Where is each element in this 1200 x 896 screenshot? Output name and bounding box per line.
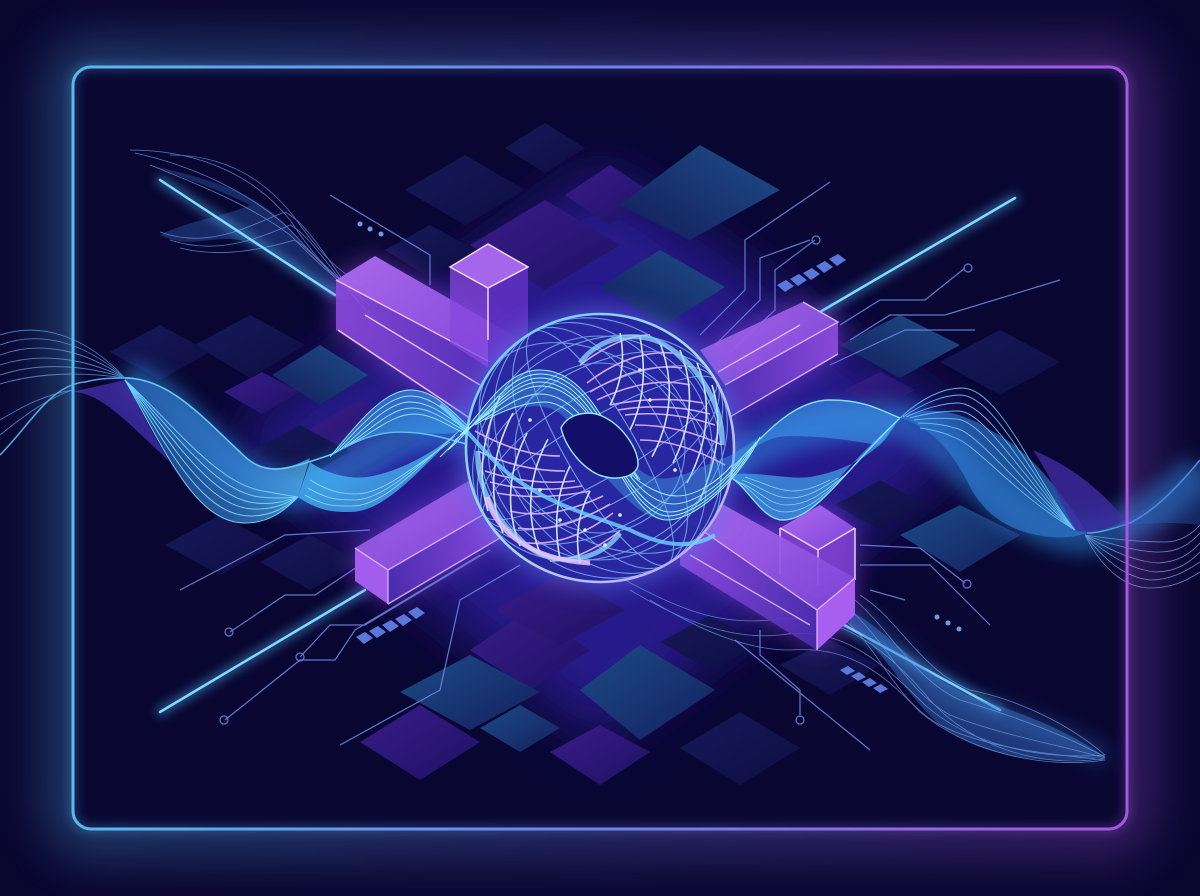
wave: upper left ribbon bbox=[130, 150, 375, 318]
beam: upright block upper bbox=[450, 244, 528, 368]
sphere body bbox=[465, 313, 735, 583]
wave: main right ribbon bbox=[725, 388, 1200, 588]
lower purple strand bbox=[487, 497, 590, 563]
frame glow bbox=[73, 67, 1127, 829]
torus ribs upper right bbox=[580, 333, 725, 500]
sparkle points bbox=[528, 368, 677, 547]
inner panel bbox=[73, 67, 1127, 829]
diagonal light beams bbox=[160, 180, 1015, 712]
central colour wash bbox=[230, 170, 980, 740]
faint fan left bbox=[0, 330, 125, 435]
wave: lower right ribbon bbox=[625, 580, 1105, 763]
beam: lower left bbox=[355, 480, 510, 604]
neon frame bbox=[73, 67, 1127, 829]
hole bbox=[561, 413, 638, 478]
circuit traces bbox=[180, 182, 1060, 750]
dotted and dashed accents bbox=[356, 222, 962, 693]
torus knot sphere bbox=[431, 273, 769, 623]
torus ribs lower left bbox=[475, 396, 620, 563]
sphere rim bbox=[466, 314, 734, 582]
frame inner glow bbox=[73, 67, 1127, 829]
second ribbon strand bbox=[440, 405, 715, 544]
beam: upper right bbox=[700, 302, 840, 420]
central ribbon band bbox=[440, 370, 760, 520]
sphere glow bbox=[460, 308, 740, 588]
beam: lower right with upright block bbox=[680, 500, 855, 650]
wave: main left ribbon bbox=[0, 330, 470, 523]
isometric diamond tiles bbox=[110, 123, 1060, 785]
sphere wire lattice bbox=[431, 273, 769, 623]
beam: upper left bbox=[335, 256, 530, 440]
